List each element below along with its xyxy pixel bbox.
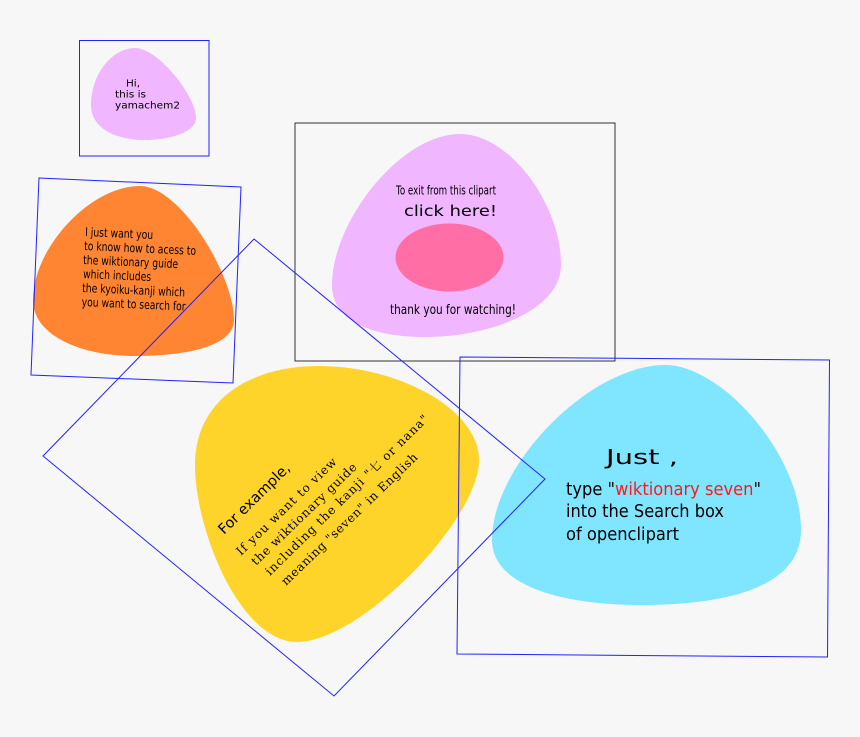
click here label: click here! [404, 202, 497, 220]
greeting blob [91, 48, 196, 140]
instruction text [566, 480, 761, 545]
example blob [195, 366, 479, 642]
button: pink ellipse [396, 224, 504, 292]
greeting frame [80, 40, 209, 156]
example heading: For example, [216, 461, 294, 538]
explanation text: to know how to acess to [84, 239, 196, 258]
instruction frame [457, 357, 830, 657]
explanation text: the kyoiku-kanji which [82, 281, 185, 299]
panel: exit message [295, 123, 615, 361]
panel: example [195, 366, 479, 642]
explanation frame [31, 178, 241, 383]
explanation text [81, 225, 196, 314]
instruction blob [492, 365, 801, 605]
explanation text: which includes [83, 267, 151, 284]
example frame [43, 239, 545, 696]
explanation text: the wiktionary guide [83, 253, 178, 271]
panel: explanation [31, 178, 241, 383]
example text: the wiktionary guide [248, 460, 360, 568]
instruction heading: Just , [603, 445, 678, 469]
exit blob [332, 134, 561, 337]
greeting text: Hi, [126, 78, 140, 90]
exit frame [295, 123, 615, 361]
example text: If you want to view [233, 455, 340, 558]
exit instruction: To exit from this clipart [395, 184, 496, 198]
thank you text: thank you for watching! [390, 302, 516, 318]
example text: meaning "seven" in English [278, 450, 421, 588]
panel: instruction [457, 357, 830, 657]
panel: greeting [80, 40, 209, 156]
instruction text: into the Search box [566, 502, 724, 522]
explanation text: you want to search for [81, 295, 186, 314]
explanation blob [33, 186, 234, 356]
instruction text: of openclipart [566, 525, 679, 545]
explanation text: I just want you [85, 225, 153, 242]
greeting text: yamachem2 [115, 100, 180, 112]
greeting text [115, 78, 180, 112]
greeting text: this is [115, 90, 146, 100]
instruction text: type "wiktionary seven" [566, 480, 761, 500]
example text: including the kanji "七 or nana" [262, 411, 431, 578]
